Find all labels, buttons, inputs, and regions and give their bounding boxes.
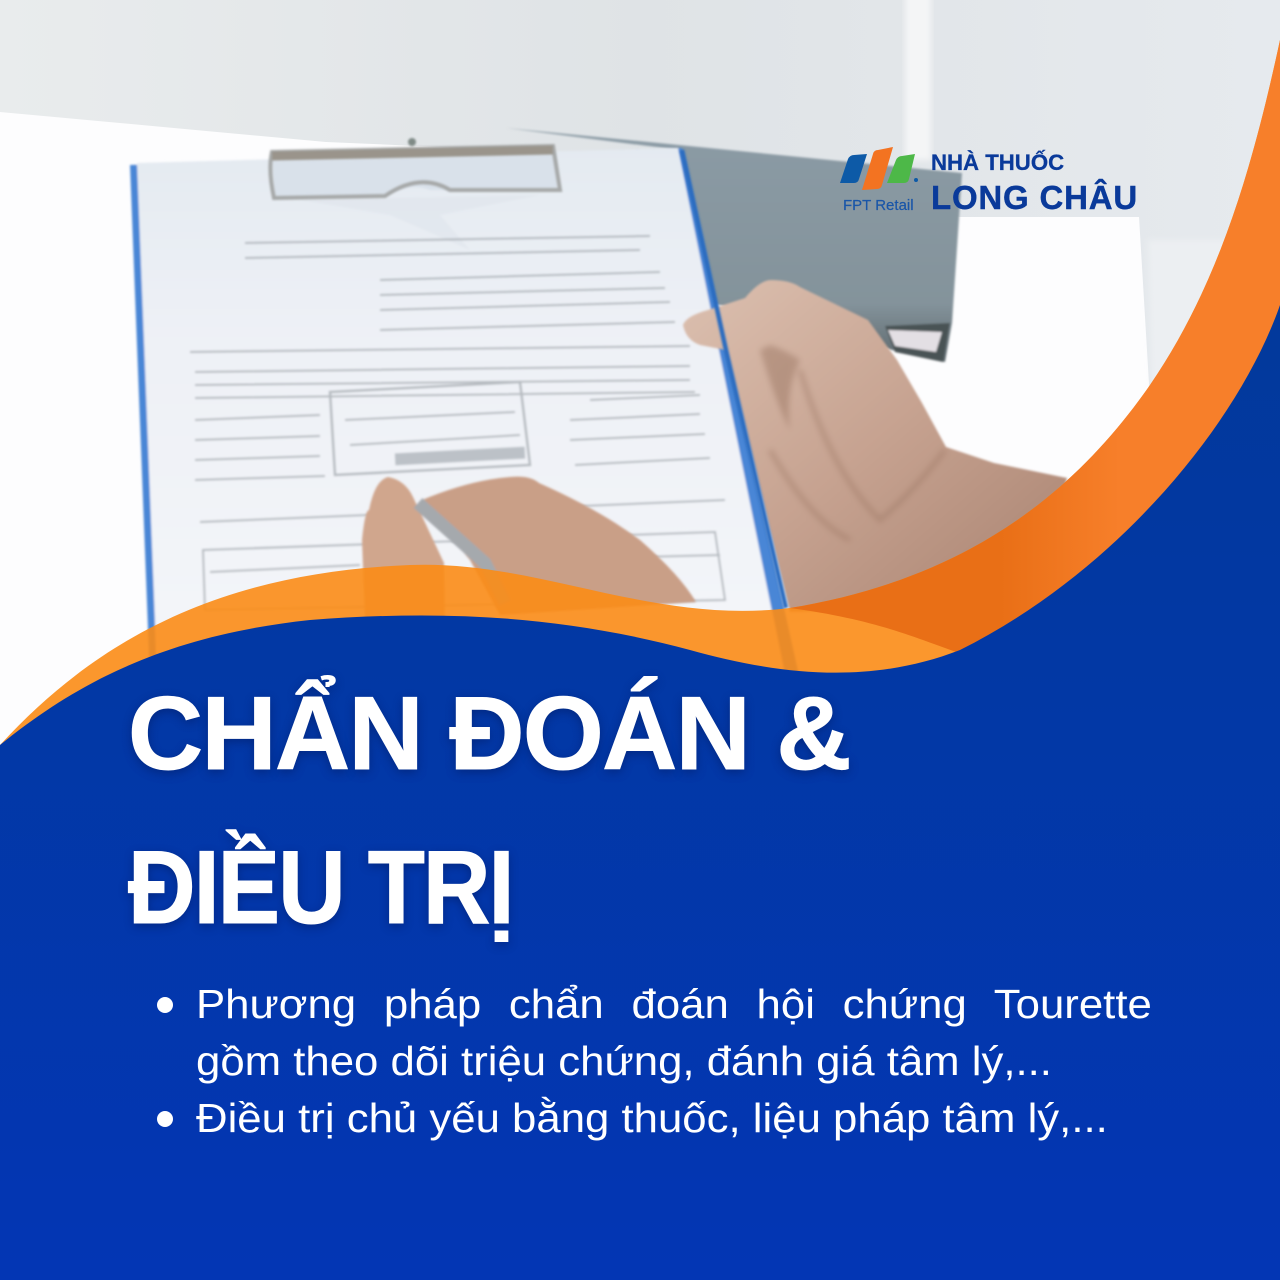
logo: FPT Retail Long Chau [840,147,1138,216]
blue wave panel [0,305,1280,1280]
form lines [190,236,725,610]
clipboard right edge over hand [682,150,786,608]
hands [362,280,1067,620]
clipboard [130,148,800,700]
bullet text line 1: Phương pháp chẩn đoán hội chứng Tourette [196,981,1152,1027]
bullet text line 2: gồm theo dõi triệu chứng, đánh giá tâm lý,... [196,1038,1052,1084]
bullet text line 3: Điều trị chủ yếu bằng thuốc, liệu pháp tâm lý,... [196,1095,1108,1141]
icon: FPT three stripes [840,147,918,190]
metal clip [270,138,560,198]
orange shaded band on the right [790,40,1280,652]
title: ĐIỀU TRỊ: ĐIỀU TRỊ [128,830,513,946]
title: CHẨN ĐOÁN &: CHẨN ĐOÁN & [128,676,850,792]
bullet dot 1 [157,997,173,1013]
text: FPT Retail: FPT Retail [843,197,914,214]
bullet dot 2 [157,1111,173,1127]
dark folder [506,128,962,362]
text: NHÀ THUỐC: NHÀ THUỐC [931,150,1064,175]
bullet list [157,981,1152,1141]
text: LONG CHÂU: LONG CHÂU [931,179,1138,216]
